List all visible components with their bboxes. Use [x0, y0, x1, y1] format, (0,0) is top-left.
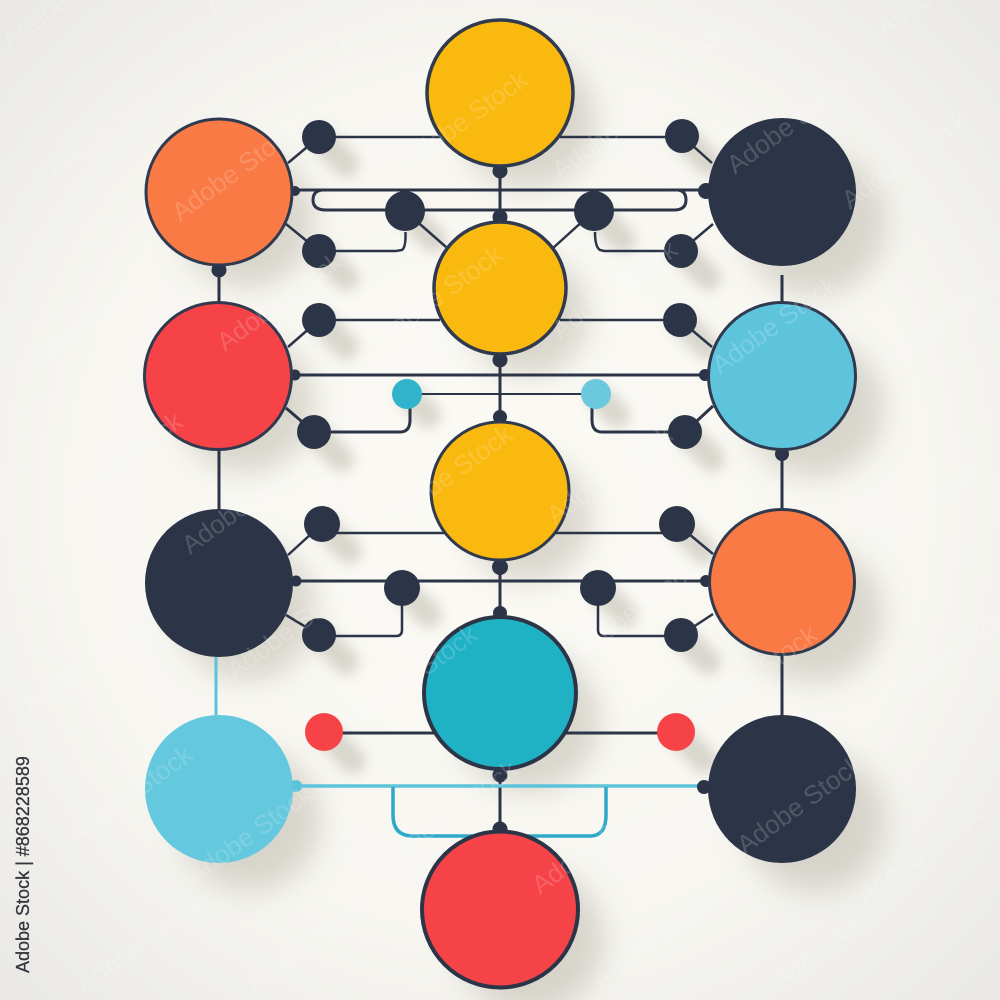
small junction dots: [212, 164, 789, 836]
big node: orange left: [146, 119, 292, 265]
stock watermarks: Adobe Stock: [371, 238, 509, 350]
stock watermarks: Adobe Stock: [566, 553, 704, 665]
stock watermarks: Adobe Stock: [546, 233, 684, 345]
big node: navy lower right: [708, 715, 856, 863]
row 1 connectors: [288, 136, 712, 163]
light blue connectors: [216, 656, 705, 836]
stock watermarks: Adobe Stock: [851, 453, 989, 565]
row 2 connectors: [219, 265, 782, 305]
small red node left: [305, 713, 343, 751]
row 3 connectors: [219, 450, 782, 510]
stock watermarks: Adobe Stock: [166, 115, 304, 227]
stock watermarks: Adobe Stock: [541, 418, 679, 530]
small teal node: [392, 379, 422, 409]
big node: light blue right: [708, 302, 856, 450]
small red node right: [657, 713, 695, 751]
stock watermarks: Adobe Stock: [176, 448, 314, 560]
light blue junction dot: [290, 780, 302, 792]
stock watermarks: Adobe Stock: [16, 608, 154, 720]
stock watermarks: Adobe Stock: [6, 275, 144, 387]
big node: third yellow: [431, 422, 569, 560]
big node: second yellow: [434, 222, 566, 354]
stock watermarks: Adobe Stock: [586, 883, 724, 995]
stock watermarks: Adobe Stock: [706, 268, 844, 380]
small navy nodes: [297, 119, 702, 652]
small light blue node: [581, 379, 611, 409]
big node: light blue left: [145, 715, 293, 863]
stock watermarks: Adobe Stock: [211, 245, 349, 357]
stock watermarks: Adobe Stock: [386, 753, 524, 865]
stock watermarks: Adobe Stock: [546, 73, 684, 185]
drop shadows: [177, 53, 886, 1000]
stock watermarks: Adobe Stock: [181, 778, 319, 890]
stock id label: Adobe Stock | #868228589: [13, 756, 33, 973]
stock watermarks: Adobe Stock: [51, 405, 189, 517]
big node: top yellow: [427, 20, 573, 166]
stock watermarks: Adobe Stock: [731, 748, 869, 860]
big node: bottom red: [422, 832, 578, 988]
connector lines: [219, 136, 782, 909]
stock watermarks: Adobe Stock: [221, 573, 359, 685]
row 4 connectors: [780, 650, 784, 716]
big node: navy left: [145, 509, 293, 657]
stock watermarks: Adobe Stock: [851, 798, 989, 910]
stock watermarks: Adobe Stock: [686, 618, 824, 730]
stock watermarks: Adobe Stock: [346, 618, 484, 730]
stock watermarks: Adobe Stock: [61, 738, 199, 850]
big node: navy right: [708, 118, 856, 266]
big node: red left: [144, 302, 292, 450]
stock watermarks: Adobe Stock: [241, 888, 379, 1000]
stock watermarks: Adobe Stock: [41, 71, 179, 183]
stock watermarks: Adobe Stock: [836, 103, 974, 215]
stock watermarks: Adobe Stock: [71, 888, 209, 1000]
big node: orange right: [710, 510, 854, 654]
stock watermarks: Adobe Stock: [721, 68, 859, 180]
stock watermarks: Adobe Stock: [396, 63, 534, 175]
big node: teal centre: [424, 617, 576, 769]
stock watermarks: Adobe Stock: [381, 418, 519, 530]
stock watermarks: Adobe Stock: [526, 788, 664, 900]
